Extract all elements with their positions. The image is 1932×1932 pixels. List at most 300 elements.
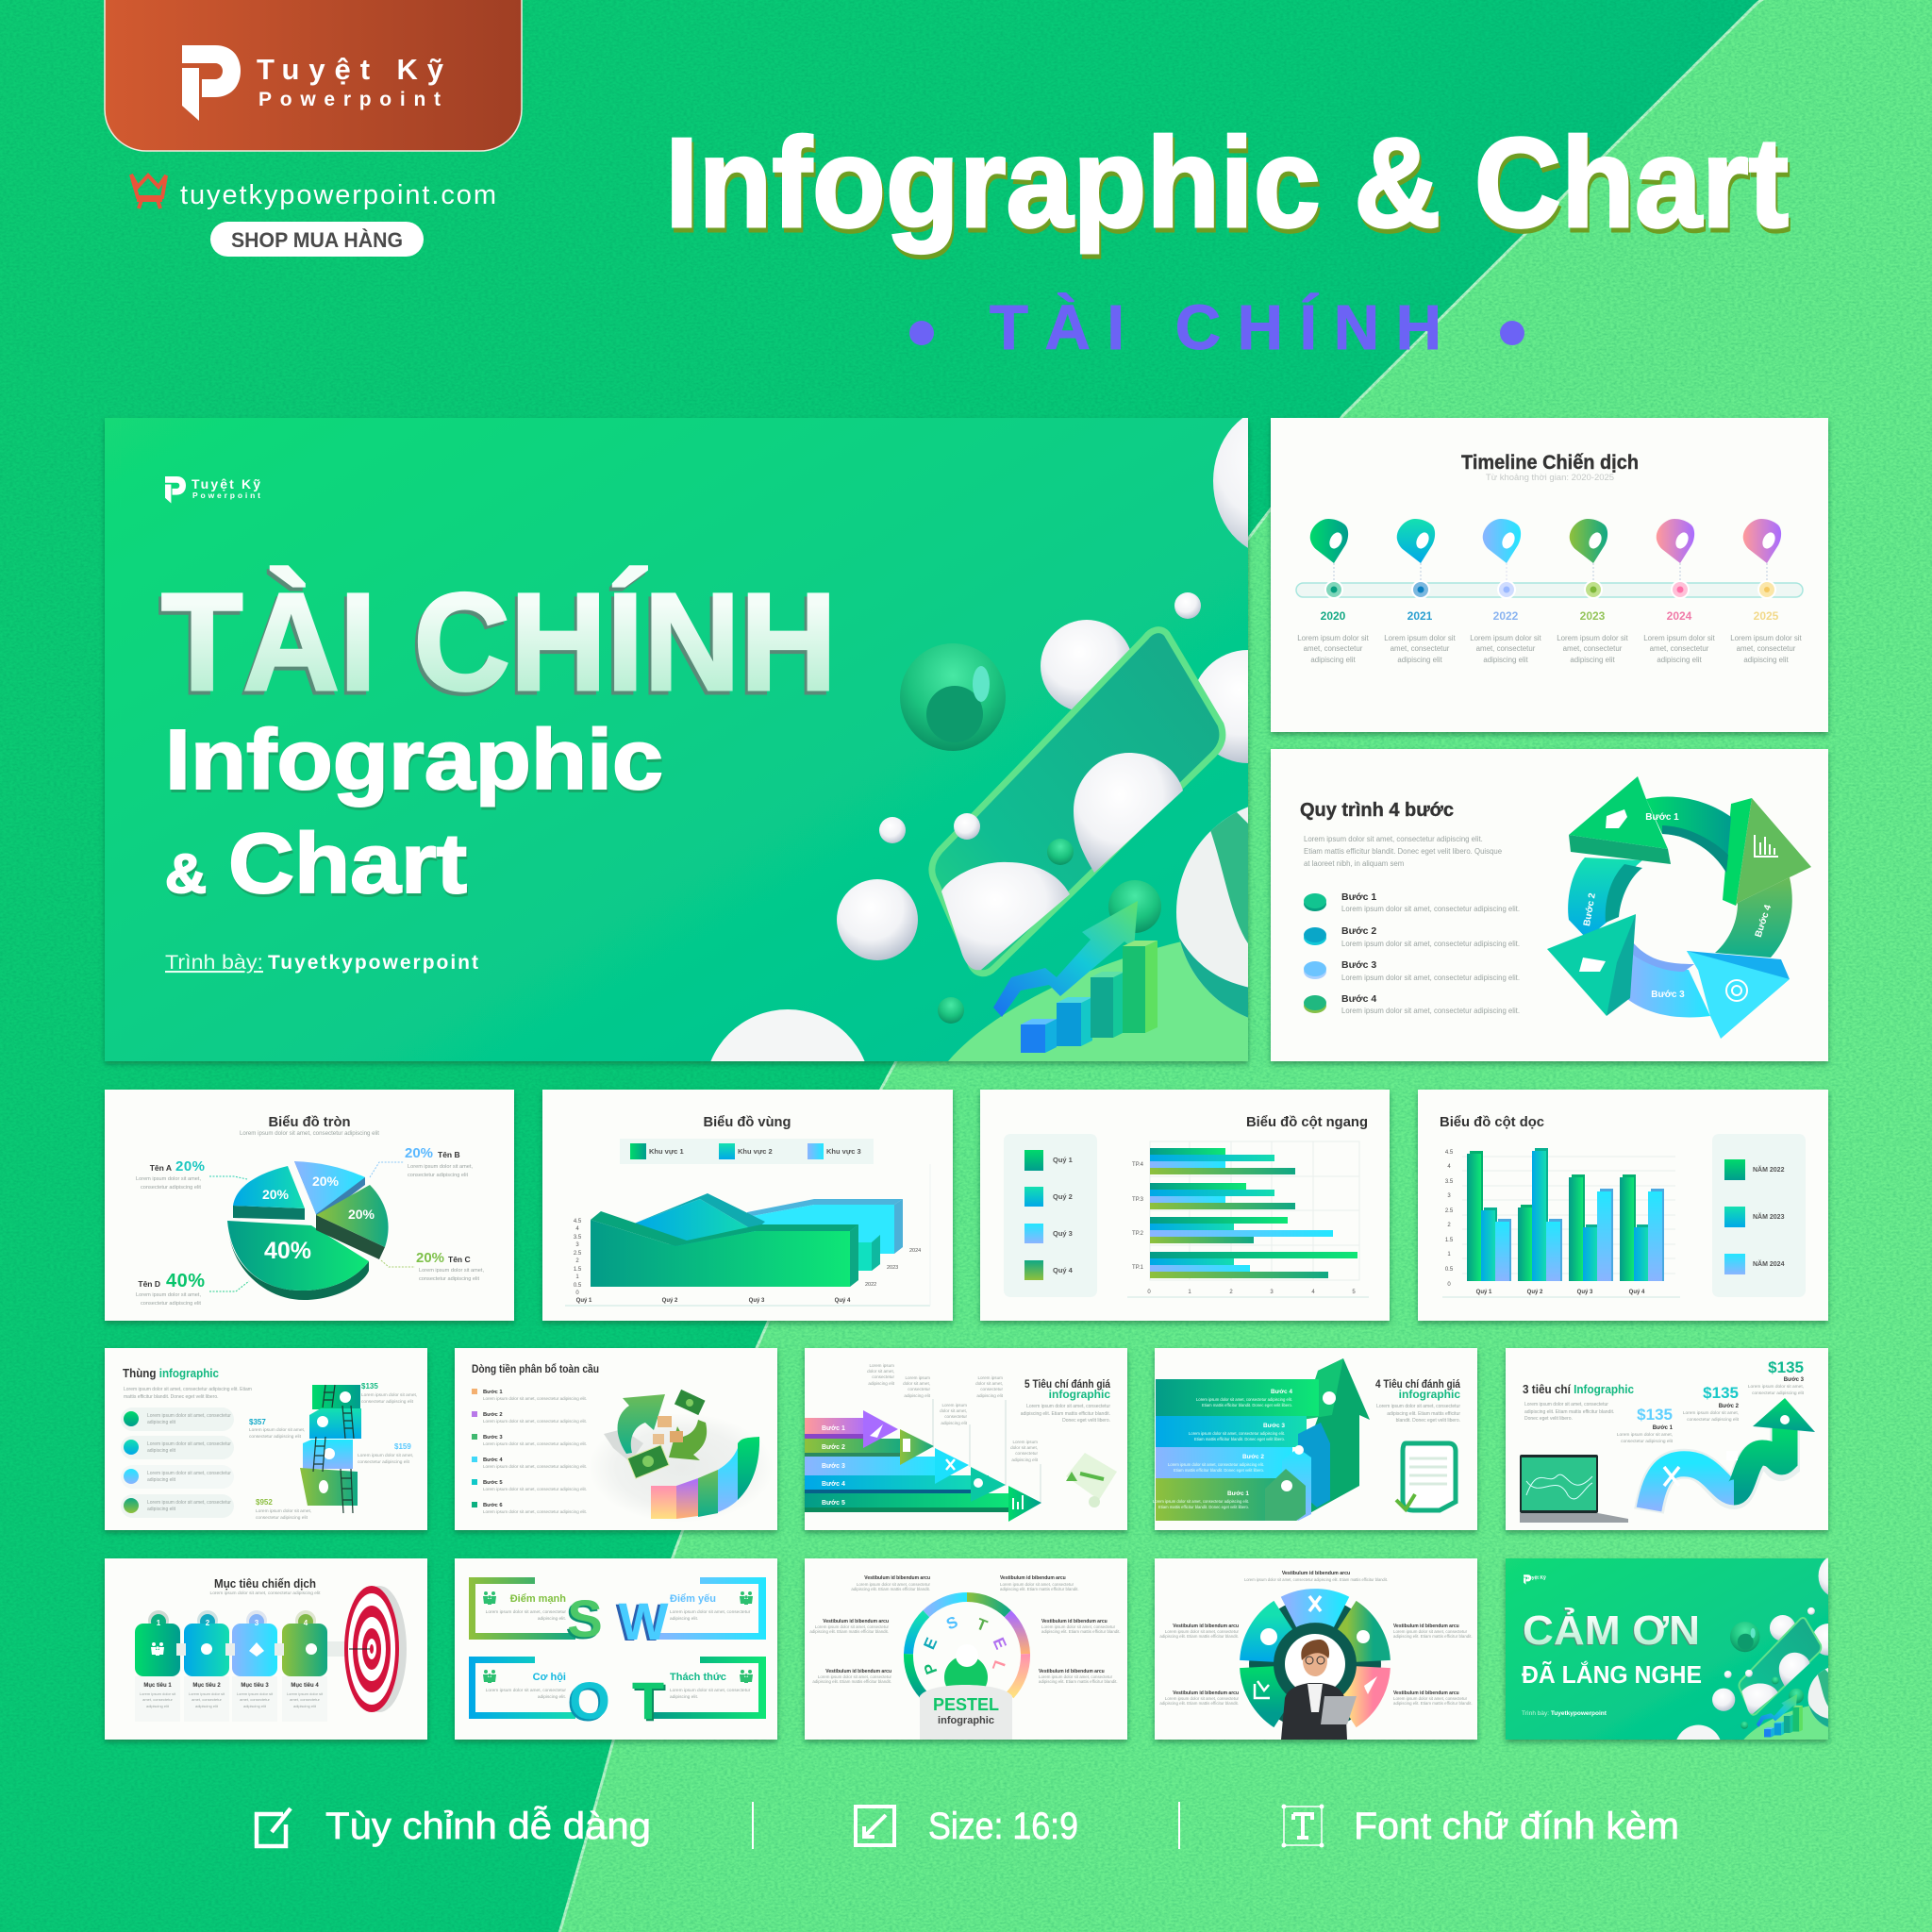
- tiny column notes: adipiscing elit: [941, 1421, 968, 1425]
- tiny column notes: adipiscing elit: [1011, 1457, 1039, 1462]
- PESTEL left notes: adipiscing elit. Etiam mattis efficitur blandit.: [851, 1587, 930, 1591]
- PESTEL hub and label: [920, 1644, 1012, 1740]
- SWOT weaknesses: W: [619, 1591, 669, 1651]
- column legend: NĂM 2024: [1753, 1259, 1785, 1268]
- tiny column notes: consectetur: [1015, 1451, 1038, 1456]
- tiny column notes: adipiscing elit: [904, 1393, 931, 1398]
- thank-you logo: [1524, 1574, 1546, 1585]
- milestone 2022: amet, consectetur: [1476, 644, 1536, 653]
- icon: P logo: [182, 45, 241, 121]
- column bars: [1442, 1148, 1680, 1297]
- area legend: Khu vực 3: [826, 1147, 861, 1156]
- callout D: Tên D: [138, 1279, 160, 1289]
- area chart 3D: 2: [575, 1258, 579, 1264]
- thank-you logo: Tuyệt Kỹ: [1526, 1575, 1546, 1581]
- hero subheading 2: Chart: [228, 817, 467, 911]
- cash flow steps: [472, 1389, 587, 1515]
- arrow: step 3: Bước 3: [1651, 990, 1685, 1000]
- tiny column notes: adipiscing elit: [976, 1393, 1004, 1398]
- panel: 4 criteria staircase: [1153, 1348, 1477, 1530]
- step list: [1304, 891, 1520, 1015]
- staircase graphic: Etiam mattis efficitur blandit. Donec eget velit libero.: [1194, 1437, 1285, 1441]
- process description: Etiam mattis efficitur blandit. Donec eget velit libero. Quisque: [1304, 847, 1502, 856]
- SWOT threats: Lorem ipsum dolor sit amet, consectetur: [670, 1688, 751, 1693]
- wheel heading: Vestibulum id bibendum arcu: [1282, 1571, 1350, 1576]
- wheel right notes: [1393, 1624, 1473, 1706]
- tiny column notes: consectetur: [980, 1387, 1003, 1391]
- stack values: $135: [361, 1382, 378, 1391]
- SWOT threats: T: [632, 1671, 664, 1730]
- goal 1: Lorem ipsum dolor sit: [140, 1691, 176, 1696]
- wheel right notes: Lorem ipsum dolor sit amet, consectetur: [1393, 1696, 1468, 1701]
- area chart 3D: 2.5: [574, 1251, 582, 1257]
- PESTEL left notes: adipiscing elit. Etiam mattis efficitur blandit.: [812, 1679, 891, 1684]
- SWOT strengths: adipiscing elit.: [538, 1616, 566, 1622]
- icon: resize: [856, 1807, 894, 1845]
- growth values: $135: [1768, 1358, 1804, 1376]
- PESTEL right notes: Lorem ipsum dolor sit amet, consectetur: [1041, 1624, 1116, 1629]
- stack option pills: Lorem ipsum dolor sit amet, consectetur: [147, 1500, 231, 1506]
- process heading: Quy trình 4 bước: [1300, 800, 1454, 821]
- callout C: Lorem ipsum dolor sit amet,: [419, 1268, 484, 1274]
- staircase graphic: Bước 3: [1263, 1423, 1285, 1429]
- stack values: consectetur adipiscing elit: [249, 1434, 302, 1440]
- tiny column notes: adipiscing elit: [868, 1381, 895, 1386]
- stacked cubes with ladders: [300, 1385, 361, 1513]
- horizontal bars: TP.2: [1132, 1231, 1144, 1237]
- column bars: Quý 3: [1577, 1290, 1593, 1295]
- milestone 2020: amet, consectetur: [1304, 644, 1363, 653]
- subtitle: finance: TÀI CHÍNH: [990, 292, 1441, 363]
- goal 4: Lorem ipsum dolor sit: [287, 1691, 324, 1696]
- tiny column notes: Lorem ipsum: [941, 1403, 967, 1407]
- tiny column notes: Lorem ipsum: [869, 1363, 894, 1368]
- stacked arrows: Bước 2: [822, 1444, 845, 1451]
- logo tab: [105, 0, 522, 151]
- website url: tuyetkypowerpoint.com: [180, 180, 496, 210]
- callout B: consectetur adipiscing elit: [408, 1173, 468, 1178]
- area chart 3D: 2024: [909, 1248, 921, 1254]
- bar legend: Quý 3: [1053, 1229, 1073, 1238]
- step list: Lorem ipsum dolor sit amet, consectetur adipiscing elit.: [1341, 939, 1520, 948]
- goal 3: Lorem ipsum dolor sit: [237, 1691, 274, 1696]
- staircase graphic: Lorem ipsum dolor sit amet, consectetur adipiscing elit.: [1168, 1462, 1264, 1467]
- area chart 3D: 4.5: [574, 1219, 582, 1224]
- goal 1: 1: [157, 1619, 161, 1627]
- staircase description: adipiscing elit. Etiam mattis efficitur: [1387, 1411, 1460, 1417]
- SWOT strengths: [469, 1577, 603, 1648]
- wheel left notes: Vestibulum id bibendum arcu: [1173, 1690, 1239, 1696]
- PESTEL letters: E: [990, 1635, 1010, 1652]
- staircase graphic: Bước 4: [1271, 1389, 1292, 1395]
- milestone 2022: [1470, 519, 1542, 664]
- growth values: Lorem ipsum dolor sit amet,: [1748, 1384, 1804, 1390]
- staircase graphic: Lorem ipsum dolor sit amet, consectetur adipiscing elit.: [1153, 1499, 1249, 1504]
- small document illustration: [1066, 1453, 1117, 1507]
- area chart 3D: Quý 3: [749, 1298, 765, 1304]
- horizontal bars: 0: [1147, 1290, 1151, 1295]
- footer divider 2: [1178, 1802, 1180, 1849]
- panel: pie chart: [105, 1090, 514, 1321]
- goal 3: 3: [255, 1619, 259, 1627]
- hero heading: TÀI CHÍNH: [161, 565, 837, 720]
- wheel left notes: Vestibulum id bibendum arcu: [1173, 1624, 1239, 1629]
- criteria description: Donec eget velit libero.: [1062, 1418, 1110, 1424]
- growth ribbon arrow: [1649, 1398, 1815, 1511]
- SWOT weaknesses: Lorem ipsum dolor sit amet, consectetur: [670, 1609, 751, 1615]
- milestone 2025: [1730, 519, 1803, 664]
- column bars: 0.5: [1445, 1267, 1454, 1273]
- stack option pills: adipiscing elit: [147, 1477, 176, 1483]
- callout B: Tên B: [438, 1150, 460, 1159]
- PESTEL right notes: Lorem ipsum dolor sit amet, consectetur: [1039, 1674, 1113, 1679]
- column bars: Quý 2: [1527, 1290, 1543, 1295]
- SWOT weaknesses: adipiscing elit.: [670, 1616, 698, 1622]
- growth values: [1617, 1358, 1805, 1444]
- icon: edit: [257, 1808, 291, 1846]
- area chart 3D: 3.5: [574, 1235, 582, 1241]
- presenter line: [165, 952, 478, 974]
- wheel left notes: Lorem ipsum dolor sit amet, consectetur: [1165, 1696, 1240, 1701]
- growth values: $135: [1703, 1384, 1739, 1402]
- horizontal bars: 3: [1270, 1290, 1274, 1295]
- panel: horizontal bar chart: [980, 1090, 1390, 1321]
- stack values: [249, 1382, 417, 1521]
- staircase heading: 4 Tiêu chí đánh giá: [1375, 1377, 1460, 1391]
- target: [316, 1586, 407, 1712]
- PESTEL letters: L: [989, 1658, 1008, 1674]
- area chart 3D: 1: [575, 1274, 579, 1280]
- presenter line: Tuyetkypowerpoint: [268, 952, 478, 974]
- column bars: Quý 4: [1629, 1290, 1645, 1295]
- goal 3: adipiscing elit: [243, 1704, 267, 1708]
- pie chart 3D: 20%: [312, 1174, 340, 1189]
- milestone 2020: Lorem ipsum dolor sit: [1297, 634, 1370, 642]
- panel: SWOT: [455, 1558, 777, 1740]
- tiny column notes: dolor sit amet,: [1010, 1445, 1038, 1450]
- stack values: Lorem ipsum dolor sit amet,: [358, 1453, 413, 1458]
- growth values: Bước 2: [1719, 1404, 1740, 1409]
- growth description: Lorem ipsum dolor sit amet, consectetur: [1524, 1402, 1608, 1407]
- panel: infographic box stack: [105, 1348, 427, 1530]
- horizontal bars: TP.1: [1132, 1265, 1144, 1271]
- milestone 2023: adipiscing elit: [1570, 656, 1615, 664]
- staircase graphic: Bước 2: [1242, 1454, 1264, 1460]
- timeline heading: Timeline Chiến dịch: [1461, 451, 1639, 474]
- milestone 2023: amet, consectetur: [1563, 644, 1623, 653]
- PESTEL right notes: [1000, 1575, 1121, 1684]
- growth values: Bước 1: [1653, 1425, 1674, 1431]
- small logo: [165, 476, 260, 503]
- wheel right notes: Lorem ipsum dolor sit amet, consectetur: [1393, 1629, 1468, 1634]
- goal 2: 2: [206, 1619, 210, 1627]
- tiny column notes: dolor sit amet,: [940, 1408, 967, 1413]
- bar legend: Quý 2: [1053, 1192, 1073, 1201]
- panel: 5 criteria arrows: [805, 1348, 1127, 1530]
- SWOT opportunities: Cơ hội: [533, 1672, 566, 1683]
- callout C: [381, 1250, 484, 1282]
- callout B: [370, 1145, 473, 1178]
- goal 3: Mục tiêu 3: [241, 1683, 269, 1689]
- stack option pills: adipiscing elit: [147, 1507, 176, 1512]
- panel: area chart: [542, 1090, 953, 1321]
- panel: 4-step process: [1271, 749, 1828, 1061]
- brand name: Tuyệt Kỹ: [257, 53, 444, 86]
- column legend: [1712, 1134, 1806, 1297]
- column bars: 2: [1447, 1223, 1451, 1228]
- milestone 2020: [1297, 519, 1370, 664]
- pie chart 3D: 40%: [264, 1238, 311, 1264]
- pie chart 3D: 20%: [348, 1207, 375, 1222]
- criteria description: Lorem ipsum dolor sit amet, consectetur: [1026, 1404, 1110, 1409]
- callout B: Lorem ipsum dolor sit amet,: [408, 1164, 473, 1170]
- horizontal bars: 1: [1188, 1290, 1191, 1295]
- pie heading: Biểu đồ tròn: [268, 1114, 351, 1130]
- horizontal bars: 5: [1352, 1290, 1356, 1295]
- column heading: Biểu đồ cột dọc: [1440, 1114, 1544, 1130]
- panel: timeline: [1271, 418, 1828, 732]
- callout C: consectetur adipiscing elit: [419, 1276, 479, 1282]
- small logo: Powerpoint: [192, 491, 260, 500]
- stack values: $952: [256, 1498, 273, 1507]
- cash flow steps: Bước 1: [483, 1390, 503, 1395]
- milestone 2024: adipiscing elit: [1657, 656, 1702, 664]
- stack option pills: Lorem ipsum dolor sit amet, consectetur: [147, 1441, 231, 1447]
- milestone 2024: amet, consectetur: [1650, 644, 1709, 653]
- PESTEL right notes: Vestibulum id bibendum arcu: [1041, 1619, 1108, 1624]
- horizontal bars: 2: [1229, 1290, 1233, 1295]
- cash flow steps: Bước 3: [483, 1435, 503, 1441]
- stack values: $357: [249, 1418, 266, 1426]
- growth values: Lorem ipsum dolor sit amet,: [1683, 1410, 1739, 1416]
- brand subtitle: Powerpoint: [258, 89, 441, 110]
- arrow: step 2: [1547, 858, 1642, 1016]
- SWOT threats: [632, 1657, 766, 1730]
- wheel right notes: Vestibulum id bibendum arcu: [1393, 1690, 1459, 1696]
- bar legend: [1004, 1134, 1097, 1297]
- thank-you heading: CẢM ƠN: [1523, 1607, 1700, 1654]
- step list: Lorem ipsum dolor sit amet, consectetur adipiscing elit.: [1341, 904, 1520, 913]
- arrow: step 1: [1569, 776, 1731, 873]
- tiny column notes: dolor sit amet,: [975, 1381, 1003, 1386]
- horizontal bars: TP.3: [1132, 1197, 1144, 1203]
- arrow: step 2: Bước 2: [1582, 891, 1598, 927]
- area chart 3D: Quý 2: [662, 1298, 678, 1304]
- goal 2: adipiscing elit: [195, 1704, 219, 1708]
- arrow: step 4: [1715, 798, 1811, 958]
- milestone 2021: 2021: [1407, 609, 1433, 623]
- tiny column notes: [867, 1363, 1039, 1462]
- PESTEL hub and label: infographic: [938, 1715, 994, 1726]
- stack values: consectetur adipiscing elit: [361, 1399, 414, 1405]
- stack values: $159: [394, 1442, 411, 1451]
- PESTEL right notes: adipiscing elit. Etiam mattis efficitur blandit.: [1041, 1629, 1121, 1634]
- panel: hero title slide: [102, 418, 1252, 1068]
- PESTEL hub and label: PESTEL: [933, 1695, 999, 1714]
- PESTEL letters: T: [974, 1615, 991, 1635]
- callout A: 20%: [175, 1158, 205, 1174]
- milestone 2024: [1643, 519, 1716, 664]
- goal 1: amet, consectetur: [142, 1697, 174, 1702]
- step list: Bước 2: [1341, 925, 1376, 937]
- milestone 2020: 2020: [1321, 609, 1346, 623]
- column bars: 2.5: [1445, 1208, 1454, 1214]
- goal 3: amet, consectetur: [240, 1697, 271, 1702]
- growth values: consectetur adipiscing elit: [1687, 1417, 1740, 1423]
- area chart 3D: 4: [575, 1226, 579, 1232]
- SWOT strengths: S: [567, 1589, 603, 1648]
- milestone 2025: adipiscing elit: [1743, 656, 1789, 664]
- area chart 3D: 2022: [865, 1282, 876, 1288]
- milestone 2025: amet, consectetur: [1737, 644, 1796, 653]
- bar heading: Biểu đồ cột ngang: [1246, 1114, 1368, 1130]
- goal 4: Mục tiêu 4: [291, 1683, 319, 1689]
- cash flow steps: Bước 2: [483, 1412, 503, 1418]
- area chart 3D: Quý 4: [835, 1298, 851, 1304]
- tiny column notes: consectetur: [908, 1387, 930, 1391]
- SWOT strengths: Lorem ipsum dolor sit amet, consectetur: [486, 1609, 566, 1615]
- milestone 2020: adipiscing elit: [1310, 656, 1356, 664]
- goal 4: adipiscing elit: [293, 1704, 317, 1708]
- panel: campaign goals: [105, 1558, 427, 1740]
- tiny column notes: consectetur: [944, 1414, 967, 1419]
- goal 4: amet, consectetur: [290, 1697, 321, 1702]
- tiny column notes: dolor sit amet,: [867, 1369, 894, 1374]
- callout D: [136, 1271, 249, 1307]
- staircase heading accent: infographic: [1399, 1388, 1460, 1401]
- column bars: 0: [1447, 1282, 1451, 1288]
- cash flow steps: Lorem ipsum dolor sit amet, consectetur adipiscing elit.: [483, 1487, 587, 1492]
- horizontal bars: [1127, 1141, 1369, 1297]
- stack values: Lorem ipsum dolor sit amet,: [361, 1392, 417, 1398]
- milestone 2023: Lorem ipsum dolor sit: [1557, 634, 1629, 642]
- staircase description: Lorem ipsum dolor sit amet, consectetur: [1376, 1404, 1460, 1409]
- cycle arrow diagram: [1547, 776, 1811, 1039]
- PESTEL left notes: Vestibulum id bibendum arcu: [825, 1669, 891, 1674]
- PESTEL letters: [920, 1613, 1010, 1676]
- panel: thank-you slide: [1502, 1558, 1832, 1745]
- PESTEL right notes: Vestibulum id bibendum arcu: [1000, 1575, 1066, 1581]
- SWOT opportunities: Lorem ipsum dolor sit amet, consectetur: [486, 1688, 566, 1693]
- criteria heading accent: infographic: [1049, 1388, 1110, 1401]
- wheel right notes: adipiscing elit. Etiam mattis efficitur blandit.: [1393, 1634, 1473, 1639]
- thank-you presenter: Trình bày: Tuyetkypowerpoint: [1522, 1710, 1607, 1717]
- growth description: Donec eget velit libero.: [1524, 1416, 1573, 1422]
- cash flow steps: Lorem ipsum dolor sit amet, consectetur adipiscing elit.: [483, 1464, 587, 1470]
- stacked arrows: [805, 1399, 1041, 1522]
- stacked arrows: Bước 1: [822, 1425, 845, 1432]
- PESTEL letters: E: [920, 1635, 941, 1652]
- arrow: step 3: [1627, 941, 1790, 1039]
- goal 1: Mục tiêu 1: [143, 1683, 172, 1689]
- SWOT weaknesses: Điểm yếu: [670, 1593, 716, 1605]
- website link: [131, 175, 496, 210]
- callout A: consectetur adipiscing elit: [141, 1185, 201, 1191]
- growth values: Bước 3: [1784, 1377, 1805, 1383]
- goal 4: [275, 1610, 327, 1722]
- column bars: 1.5: [1445, 1238, 1454, 1243]
- callout B: 20%: [405, 1145, 433, 1161]
- goal 3: [225, 1610, 277, 1722]
- callout A: Tên A: [150, 1163, 172, 1173]
- tiny column notes: dolor sit amet,: [903, 1381, 930, 1386]
- step list: Bước 3: [1341, 959, 1376, 971]
- callout D: 40%: [166, 1271, 205, 1291]
- staircase graphic: Bước 1: [1227, 1491, 1249, 1497]
- stack option pills: Lorem ipsum dolor sit amet, consectetur: [147, 1413, 231, 1419]
- tiny column notes: consectetur: [872, 1374, 894, 1379]
- stack option pills: Lorem ipsum dolor sit amet, consectetur: [147, 1471, 231, 1476]
- goal 1: adipiscing elit: [146, 1704, 170, 1708]
- column bars: 1: [1447, 1252, 1451, 1257]
- PESTEL left notes: adipiscing elit. Etiam mattis efficitur blandit.: [809, 1629, 889, 1634]
- PESTEL right notes: Vestibulum id bibendum arcu: [1039, 1669, 1105, 1674]
- growth values: consectetur adipiscing elit: [1621, 1439, 1674, 1444]
- main title: Infographic & Chart: [665, 111, 1789, 254]
- bar legend: Quý 1: [1053, 1156, 1073, 1164]
- wheel left notes: [1159, 1624, 1240, 1706]
- process description: at laoreet nibh, in aliquam sem: [1304, 859, 1404, 868]
- SWOT weaknesses: [619, 1577, 766, 1651]
- icon: text box: [1281, 1804, 1324, 1847]
- SWOT opportunities: [469, 1657, 610, 1730]
- tiny column notes: Lorem ipsum: [1012, 1440, 1038, 1444]
- goals subheading: Lorem ipsum dolor sit amet, consectetur adipiscing elit: [209, 1591, 321, 1596]
- icon: checklist document: [1396, 1443, 1456, 1510]
- staircase graphic: Etiam mattis efficitur blandit. Donec eget velit libero.: [1174, 1468, 1264, 1473]
- arrow: step 1: Bước 1: [1645, 812, 1679, 823]
- cash flow steps: Lorem ipsum dolor sit amet, consectetur adipiscing elit.: [483, 1419, 587, 1424]
- growth values: Lorem ipsum dolor sit amet,: [1617, 1432, 1673, 1438]
- growth values: consectetur adipiscing elit: [1752, 1391, 1805, 1396]
- milestone 2022: Lorem ipsum dolor sit: [1470, 634, 1542, 642]
- small logo: Tuyệt Kỹ: [192, 476, 260, 491]
- footer feature: easy customization: Tùy chỉnh dễ dàng: [325, 1805, 651, 1847]
- callout A: Lorem ipsum dolor sit amet,: [136, 1176, 201, 1182]
- cash flow heading: Dòng tiền phân bổ toàn cầu: [472, 1362, 599, 1375]
- area chart 3D: 3: [575, 1242, 579, 1248]
- callout C: Tên C: [448, 1255, 471, 1264]
- step list: Bước 4: [1341, 993, 1376, 1005]
- cash flow steps: Lorem ipsum dolor sit amet, consectetur adipiscing elit.: [483, 1396, 587, 1402]
- column legend: NĂM 2023: [1753, 1212, 1785, 1221]
- milestone 2021: Lorem ipsum dolor sit: [1384, 634, 1457, 642]
- callout C: 20%: [416, 1250, 444, 1266]
- goal 2: Mục tiêu 2: [192, 1683, 221, 1689]
- step list: Lorem ipsum dolor sit amet, consectetur adipiscing elit.: [1341, 973, 1520, 982]
- PESTEL right notes: adipiscing elit. Etiam mattis efficitur blandit.: [1000, 1587, 1079, 1591]
- stacked arrows: Bước 5: [822, 1500, 845, 1507]
- laptop illustration: [1520, 1455, 1628, 1523]
- button: shop: [210, 222, 424, 257]
- growth description: adipiscing elit. Etiam mattis efficitur blandit.: [1524, 1409, 1614, 1415]
- cash flow steps: Bước 4: [483, 1457, 503, 1463]
- milestone 2024: Lorem ipsum dolor sit: [1643, 634, 1716, 642]
- goal 1: [135, 1610, 180, 1722]
- callout D: consectetur adipiscing elit: [141, 1301, 201, 1307]
- cash flow steps: Lorem ipsum dolor sit amet, consectetur adipiscing elit.: [483, 1509, 587, 1515]
- PESTEL right notes: Lorem ipsum dolor sit amet, consectetur: [1000, 1582, 1074, 1587]
- PESTEL left notes: Vestibulum id bibendum arcu: [823, 1619, 889, 1624]
- milestone 2023: [1557, 519, 1629, 664]
- PESTEL left notes: Lorem ipsum dolor sit amet, consectetur: [818, 1674, 892, 1679]
- milestone 2023: 2023: [1580, 609, 1606, 623]
- character: presenter with tablet: [1281, 1640, 1357, 1740]
- wheel left notes: adipiscing elit. Etiam mattis efficitur blandit.: [1159, 1701, 1239, 1706]
- column bars: 4.5: [1445, 1150, 1454, 1156]
- cash flow illustration: [589, 1390, 774, 1523]
- milestone 2024: 2024: [1667, 609, 1692, 623]
